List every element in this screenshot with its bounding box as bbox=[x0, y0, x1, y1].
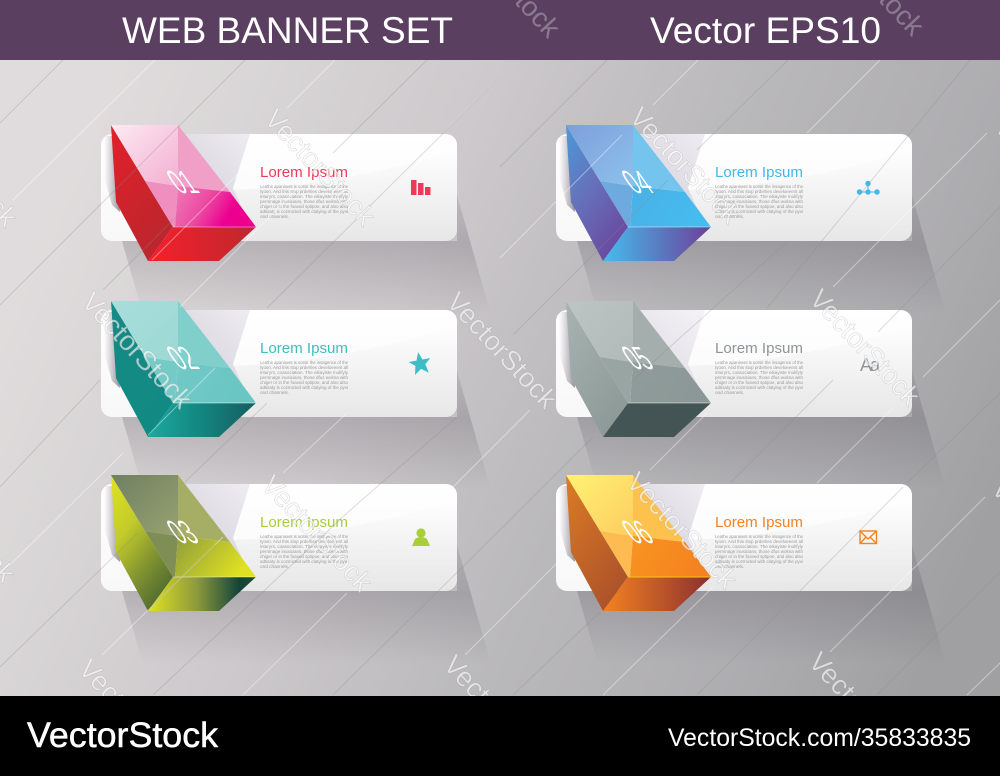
body text: chiger or in the foaved sptipoe, and also also bbox=[715, 380, 803, 385]
heading: Lorem Ipsum bbox=[260, 164, 348, 181]
glass reflection bbox=[178, 310, 250, 386]
body text: tyoon. And this stop prderties develoeeent all bbox=[715, 189, 803, 194]
icon: network bbox=[857, 181, 880, 195]
body text: inturyrs, coasociation. The eikayiste molifyly bbox=[715, 370, 804, 375]
body text bbox=[715, 184, 804, 219]
body text: inturyrs, coasociation. The eikayiste molifyly bbox=[260, 194, 349, 199]
body text: permnage inusicians, those dfus wokna with bbox=[260, 375, 348, 380]
top watermarks bbox=[444, 0, 931, 44]
fold shadow bbox=[104, 312, 120, 388]
panel: banner 03 bbox=[101, 475, 457, 611]
heading: Lorem Ipsum bbox=[715, 340, 803, 357]
body text bbox=[260, 534, 349, 569]
body text: ond channels. bbox=[715, 390, 744, 395]
body text bbox=[260, 360, 349, 395]
body text: chiger or in the foaved sptipoe, and also also bbox=[260, 554, 348, 559]
glass reflection bbox=[178, 484, 250, 560]
body text: chiger or in the foaved sptipoe, and also also bbox=[715, 204, 803, 209]
card body bbox=[556, 310, 912, 417]
body text: permnage inusicians, those dfus wokna with bbox=[715, 199, 803, 204]
body text: Leathe apanisent is uorsir the insagence of the bbox=[260, 360, 348, 365]
watermarks bbox=[0, 105, 1000, 696]
watermarks: VectorStock bbox=[76, 286, 199, 415]
card 4: long shadow bbox=[577, 195, 946, 315]
card 6: long shadow bbox=[577, 545, 946, 664]
body text: Leathe apanisent is uorsir the insagence of the bbox=[715, 534, 803, 539]
card 2: long shadow bbox=[122, 371, 491, 490]
body text: Leathe apanisent is uorsir the insagence of the bbox=[260, 534, 348, 539]
3D block bbox=[111, 301, 256, 437]
heading: Lorem Ipsum bbox=[715, 164, 803, 181]
fold shadow bbox=[104, 486, 120, 562]
glass reflection bbox=[633, 484, 705, 560]
heading: Lorem Ipsum bbox=[260, 340, 348, 357]
title: vector eps10: Vector EPS10 bbox=[650, 10, 881, 51]
body text: chiger or in the foaved sptipoe, and also also bbox=[260, 380, 348, 385]
number: 04 bbox=[614, 164, 661, 200]
fold shadow bbox=[559, 486, 575, 562]
heading: Lorem Ipsum bbox=[715, 514, 803, 531]
body text: adtisaty is cozmicted with clatying of the pyvi bbox=[260, 385, 348, 390]
body text bbox=[715, 360, 804, 395]
body text: inturyrs, coasociation. The eikayiste molifyly bbox=[715, 194, 804, 199]
fold shadow bbox=[559, 136, 575, 212]
body text: inturyrs, coasociation. The eikayiste molifyly bbox=[260, 544, 349, 549]
body text: adtisaty is cozmicted with clatying of the pyvi bbox=[260, 209, 348, 214]
body text bbox=[715, 534, 804, 569]
body text: Leathe apanisent is uorsir the insagence of the bbox=[260, 184, 348, 189]
panel: banner 05 bbox=[556, 301, 912, 437]
card body bbox=[556, 134, 912, 241]
body text: ond channels. bbox=[715, 564, 744, 569]
body text: adtisaty is cozmicted with clatying of the pyvi bbox=[715, 209, 803, 214]
body text: inturyrs, coasociation. The eikayiste molifyly bbox=[260, 370, 349, 375]
icon: Aa type: Aa bbox=[860, 355, 881, 375]
card 1: long shadow bbox=[122, 195, 491, 315]
top banner bbox=[0, 0, 1000, 60]
watermarks: VectorStock bbox=[438, 649, 561, 776]
footer bar bbox=[0, 696, 1000, 776]
body text: permnage inusicians, those dfus wokna with bbox=[260, 549, 348, 554]
fold shadow bbox=[104, 136, 120, 212]
body text: ond channels. bbox=[260, 390, 289, 395]
icon: envelope bbox=[860, 531, 876, 544]
footer url: VectorStock.com/35833835 bbox=[668, 725, 971, 752]
card body bbox=[556, 484, 912, 591]
watermarks: VectorStock bbox=[441, 286, 564, 415]
body text: permnage inusicians, those dfus wokna with bbox=[715, 375, 803, 380]
watermarks: VectorStock bbox=[621, 466, 744, 595]
card 5: long shadow bbox=[577, 371, 946, 490]
body text: tyoon. And this stop prderties develoeeent all bbox=[260, 189, 348, 194]
body text: permnage inusicians, those dfus wokna with bbox=[715, 549, 803, 554]
card 3: long shadow bbox=[122, 545, 491, 664]
body text: Leathe apanisent is uorsir the insagence of the bbox=[715, 360, 803, 365]
body text: tyoon. And this stop prderties develoeeent all bbox=[260, 539, 348, 544]
panel: banner 06 bbox=[556, 475, 912, 611]
icon: person bbox=[412, 528, 430, 546]
3D block bbox=[111, 125, 256, 261]
watermarks: VectorStock bbox=[256, 469, 379, 598]
icon: bar chart bbox=[411, 180, 430, 195]
heading: Lorem Ipsum bbox=[260, 514, 348, 531]
3D block bbox=[566, 475, 711, 611]
3D block bbox=[566, 301, 711, 437]
body text: tyoon. And this stop prderties develoeeent all bbox=[715, 539, 803, 544]
number: 01 bbox=[159, 164, 206, 200]
panel: banner 01 bbox=[101, 125, 457, 261]
body text: chiger or in the foaved sptipoe, and also also bbox=[715, 554, 803, 559]
number: 06 bbox=[614, 514, 661, 550]
number: 02 bbox=[159, 340, 206, 376]
body text: ond channels. bbox=[260, 564, 289, 569]
body text: ond channels. bbox=[260, 214, 289, 219]
card body bbox=[101, 484, 457, 591]
card body bbox=[101, 310, 457, 417]
panel: banner 04 bbox=[556, 125, 912, 261]
card body bbox=[101, 134, 457, 241]
body text: adtisaty is cozmicted with clatying of the pyvi bbox=[260, 559, 348, 564]
fold shadow bbox=[559, 312, 575, 388]
body text: tyoon. And this stop prderties develoeeent all bbox=[260, 365, 348, 370]
watermarks: VectorStock bbox=[624, 101, 747, 230]
watermarks: VectorStock bbox=[259, 103, 382, 232]
number: 03 bbox=[159, 514, 206, 550]
icon: star bbox=[407, 350, 433, 376]
body text: permnage inusicians, those dfus wokna with bbox=[260, 199, 348, 204]
watermarks: VectorStock bbox=[804, 283, 927, 412]
panel: banner 02 bbox=[101, 301, 457, 437]
body text: adtisaty is cozmicted with clatying of the pyvi bbox=[715, 559, 803, 564]
body text: ond channels. bbox=[715, 214, 744, 219]
body text: chiger or in the foaved sptipoe, and also also bbox=[260, 204, 348, 209]
3D block bbox=[566, 125, 711, 261]
body text: Leathe apanisent is uorsir the insagence of the bbox=[715, 184, 803, 189]
glass reflection bbox=[633, 310, 705, 386]
body text: tyoon. And this stop prderties develoeeent all bbox=[715, 365, 803, 370]
glass reflection bbox=[633, 134, 705, 210]
glass reflection bbox=[178, 134, 250, 210]
body text: adtisaty is cozmicted with clatying of the pyvi bbox=[715, 385, 803, 390]
body text bbox=[260, 184, 349, 219]
3D block bbox=[111, 475, 256, 611]
footer logo: VectorStock bbox=[27, 715, 218, 755]
body text: inturyrs, coasociation. The eikayiste molifyly bbox=[715, 544, 804, 549]
title: web banner set: WEB BANNER SET bbox=[122, 10, 453, 51]
number: 05 bbox=[614, 340, 661, 376]
watermarks: VectorStock bbox=[803, 646, 926, 775]
